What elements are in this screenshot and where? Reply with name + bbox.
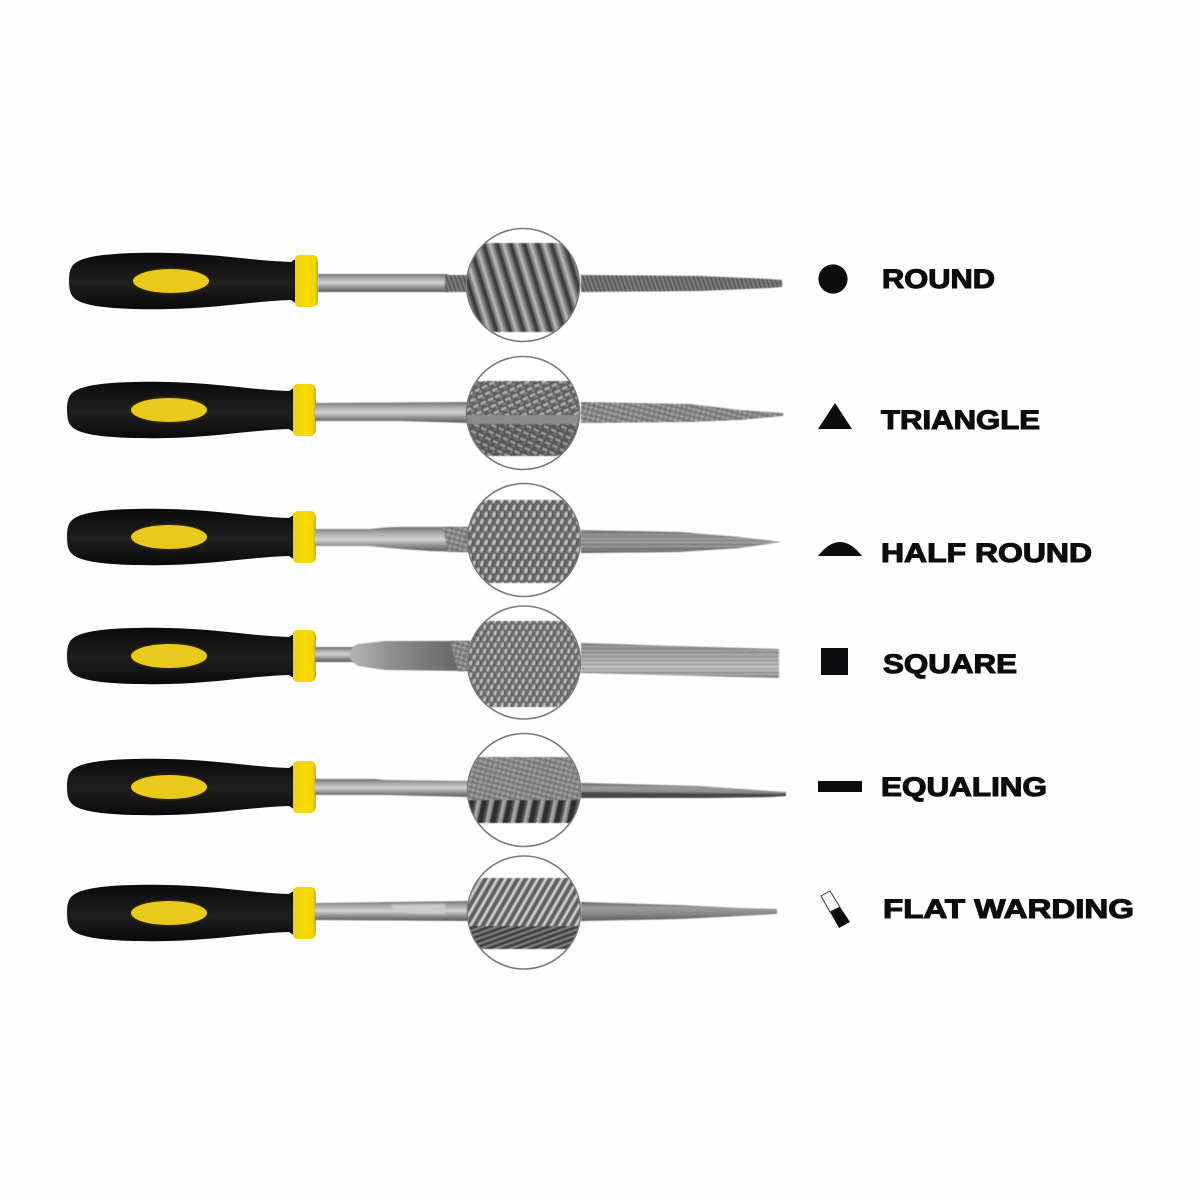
round file blade — [445, 275, 782, 292]
file: round — [69, 228, 782, 342]
square file magnifier — [460, 606, 590, 719]
equaling file magnifier — [460, 734, 590, 846]
legend: equaling — [818, 772, 1047, 802]
square file tang — [315, 647, 355, 662]
square file handle — [67, 628, 316, 684]
icon: square — [821, 648, 848, 675]
flat warding file tang — [315, 901, 470, 921]
label: triangle: TRIANGLE — [881, 405, 1040, 435]
half round file blade — [581, 530, 782, 553]
legend: round — [818, 264, 995, 294]
round file handle — [69, 253, 318, 309]
file: triangle — [67, 356, 783, 470]
triangle file blade — [581, 402, 783, 423]
round file tang — [318, 274, 448, 292]
label: flat warding: FLAT WARDING — [883, 894, 1134, 924]
icon: triangle — [818, 403, 852, 429]
flat warding file blade — [581, 902, 777, 921]
legend: triangle — [818, 403, 1040, 435]
legend: flat warding — [821, 891, 1134, 928]
flat warding file highlight — [390, 904, 445, 914]
flat warding file magnifier — [460, 856, 590, 969]
square file shoulder — [350, 641, 470, 671]
equaling file handle — [67, 759, 316, 815]
triangle file handle — [67, 382, 316, 438]
square file blade — [581, 643, 779, 678]
file: equaling — [67, 734, 786, 846]
flat warding file handle — [67, 885, 316, 941]
round file magnifier — [460, 228, 590, 342]
label: round: ROUND — [882, 264, 995, 294]
label: square: SQUARE — [883, 649, 1017, 679]
triangle file magnifier — [460, 356, 590, 470]
half round file tang and shoulder — [315, 527, 470, 552]
file: square — [67, 606, 779, 719]
legend: square — [821, 648, 1017, 679]
icon: circle — [818, 264, 848, 294]
half round file magnifier — [460, 484, 590, 596]
square file cut start — [450, 641, 470, 671]
label: equaling: EQUALING — [881, 772, 1047, 802]
triangle file tang — [315, 402, 470, 423]
legend: half round — [818, 538, 1092, 568]
half round file handle — [67, 509, 316, 565]
file: flat warding — [67, 856, 777, 969]
icon: tilted two-tone bar — [821, 891, 850, 928]
equaling file tang — [315, 779, 470, 797]
icon: flat bar — [818, 781, 862, 792]
file: half round — [67, 484, 782, 596]
equaling file blade — [581, 783, 786, 798]
half round file cut start — [443, 527, 470, 552]
icon: half round — [818, 542, 862, 556]
label: half round: HALF ROUND — [881, 538, 1092, 568]
